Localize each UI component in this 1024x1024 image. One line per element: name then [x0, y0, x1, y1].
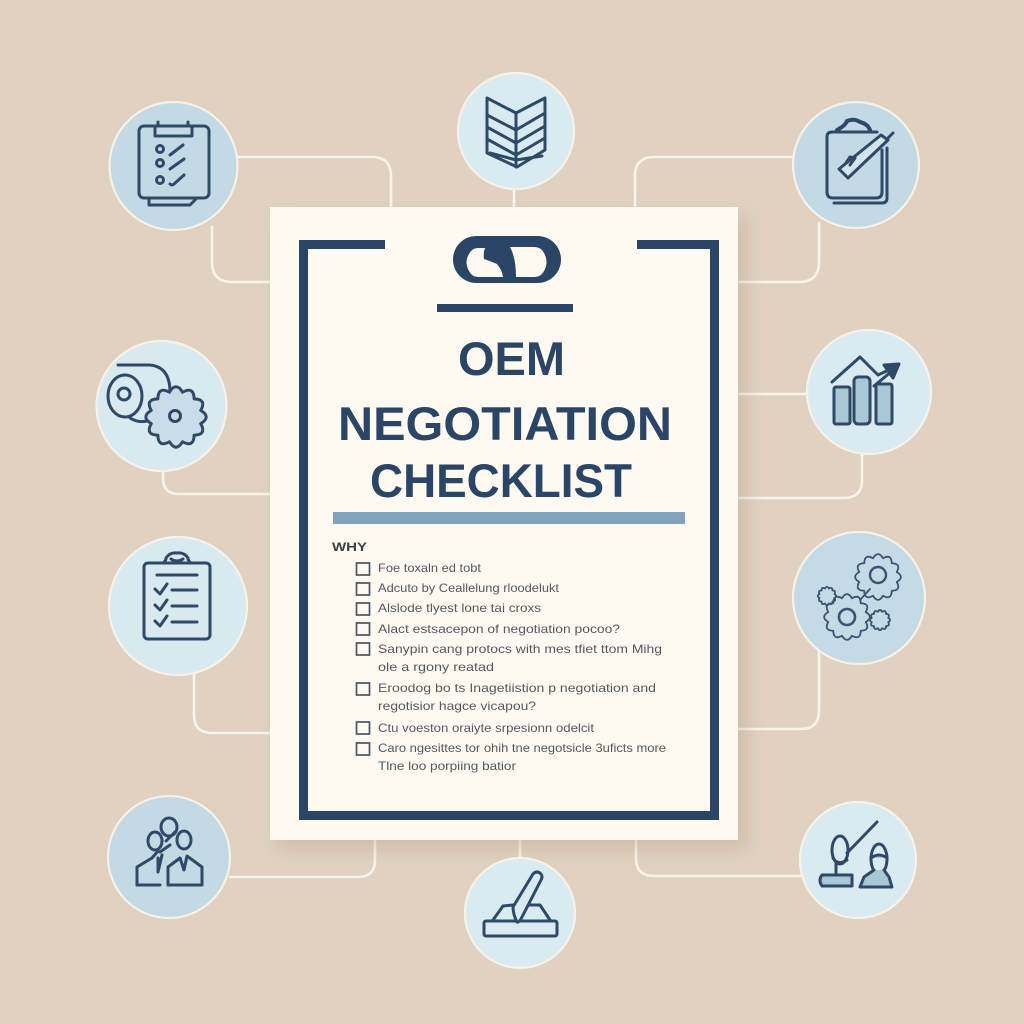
icon: bar chart with arrow (middle right): [807, 330, 931, 454]
checklist: Alslode tlyest lone tai croxs: [378, 601, 541, 615]
icon: clipboard with pen (top right): [793, 102, 919, 228]
title: [338, 332, 672, 507]
checklist: [356, 561, 666, 773]
icon: checklist clipboard (top left): [110, 102, 238, 230]
icon: team of people (bottom left): [108, 796, 230, 918]
title underline bar: [333, 512, 685, 524]
title: NEGOTIATION: [338, 397, 672, 450]
icon: chain link: [453, 236, 561, 283]
sheet frame: [304, 244, 714, 816]
connector lines: [163, 157, 862, 877]
checklist: Adcuto by Ceallelung rloodelukt: [378, 581, 560, 595]
checklist: Foe toxaln ed tobt: [378, 561, 482, 575]
icon: writing tray (bottom centre): [465, 858, 575, 968]
checklist: Alact estsacepon of negotiation pocoo?: [378, 622, 620, 636]
checklist: ole a rgony reatad: [378, 660, 494, 674]
title rule: [437, 304, 573, 312]
checklist: Ctu voeston oraiyte srpesionn odelcit: [378, 721, 595, 735]
icon: two people with pointer (bottom right): [800, 802, 916, 918]
icon: task clipboard (lower left): [109, 537, 247, 675]
checklist: Tlne loo porpiing batior: [378, 759, 516, 773]
checklist: Caro ngesittes tor ohih tne negotsicle 3uficts more: [378, 741, 666, 755]
panel: checklist sheet: [270, 207, 738, 840]
title: OEM: [458, 332, 565, 385]
title: CHECKLIST: [370, 454, 632, 507]
checklist: Eroodog bo ts Inagetiistion p negotiation and: [378, 681, 656, 695]
paper shadow: [278, 216, 746, 849]
icon: roll and gear (middle left): [96, 341, 226, 471]
checklist: regotisior hagce vicapou?: [378, 699, 536, 713]
icon: gears (lower right): [793, 532, 925, 664]
checklist: Sanypin cang protocs with mes tfiet ttom Mihg: [378, 642, 662, 656]
section label: WHY: [332, 540, 367, 554]
icon: book (top centre): [458, 73, 574, 189]
